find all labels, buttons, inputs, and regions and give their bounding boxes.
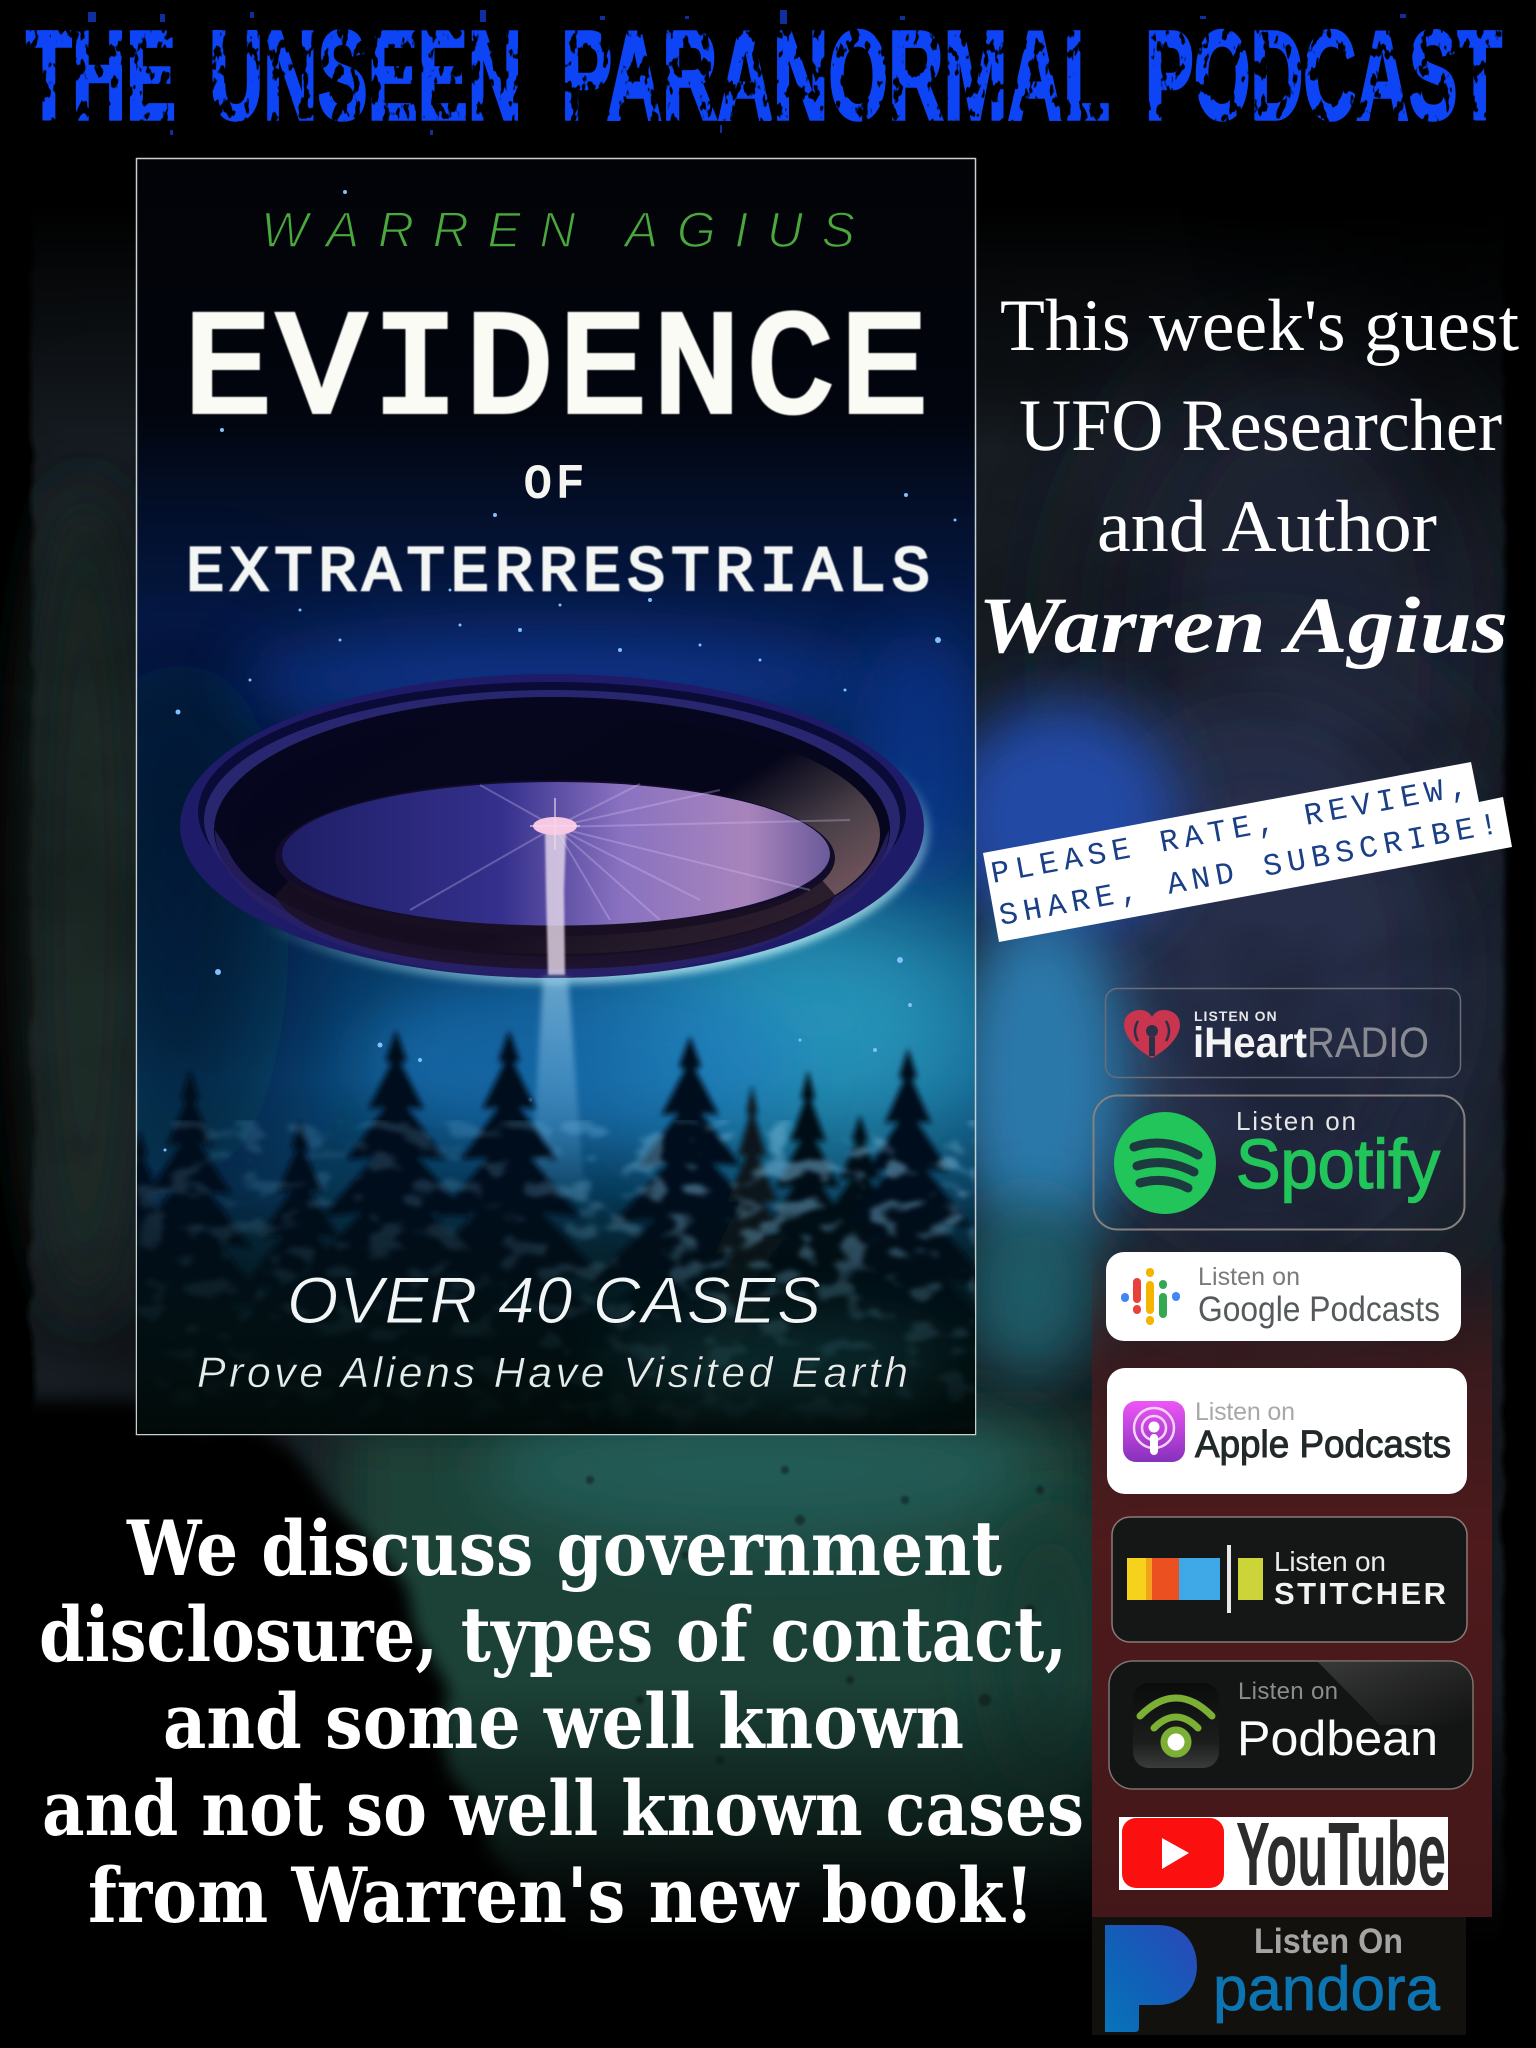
button: Pandora xyxy=(1092,1917,1466,2035)
button: Spotify xyxy=(1094,1096,1464,1230)
button: Podbean: Listen on xyxy=(1238,1678,1338,1705)
button: Stitcher: STITCHER xyxy=(1274,1576,1446,1611)
button: Pandora: Listen On xyxy=(1254,1922,1403,1961)
button: Podbean: Podbean xyxy=(1237,1712,1438,1766)
title: UNSEEN xyxy=(209,5,522,146)
button: Stitcher: Listen on xyxy=(1274,1546,1386,1577)
rate and subscribe banner: PLEASE RATE, REVIEW, xyxy=(988,770,1471,893)
button: iHeartRadio: RADIO xyxy=(1307,1019,1429,1067)
dark specks xyxy=(586,1466,1044,1805)
icon: flying saucer xyxy=(174,674,930,984)
icon: tree silhouette xyxy=(0,1400,660,2048)
discussion text xyxy=(39,1504,1084,1940)
button: Spotify: Listen on xyxy=(1236,1106,1356,1136)
guest heading xyxy=(978,285,1519,670)
book author: WARREN AGIUS xyxy=(261,202,855,258)
trees xyxy=(137,1028,975,1417)
button: Google Podcasts: Listen on xyxy=(1198,1263,1300,1291)
icon: iHeart xyxy=(1124,1010,1180,1058)
button: iHeartRadio: iHeart xyxy=(1193,1019,1307,1067)
icon: Spotify xyxy=(1114,1112,1216,1214)
red panel behind buttons xyxy=(1092,1240,1492,1917)
guest name: Warren Agius xyxy=(978,582,1508,670)
light beam xyxy=(530,978,585,1200)
button: Spotify: Spotify xyxy=(1236,1125,1440,1203)
tree highlights xyxy=(137,1120,975,1430)
book title: EVIDENCE xyxy=(184,289,928,455)
button: iHeartRadio: LISTEN ON xyxy=(1194,1008,1278,1024)
book cover xyxy=(136,158,976,1436)
icon: Pandora P xyxy=(1105,1925,1197,2032)
discussion text: We discuss government xyxy=(126,1504,1002,1593)
guest heading: UFO Researcher xyxy=(1019,385,1502,467)
book tagline: OVER 40 CASES xyxy=(287,1263,821,1337)
title: THE xyxy=(26,5,176,146)
discussion text: disclosure, types of contact, xyxy=(39,1590,1067,1679)
book tagline second line: Prove Aliens Have Visited Earth xyxy=(197,1349,908,1397)
title: PARANORMAL xyxy=(561,5,1110,146)
icon: Podbean xyxy=(1133,1683,1219,1768)
title specks xyxy=(88,10,1406,135)
icon: Stitcher xyxy=(1127,1545,1263,1613)
guest heading: and Author xyxy=(1097,486,1437,568)
rate and subscribe banner: SHARE, AND SUBSCRIBE! xyxy=(996,808,1501,935)
book subtitle: of: OF xyxy=(524,459,584,511)
book subtitle: extraterrestrials: EXTRATERRESTRIALS xyxy=(186,538,930,610)
icon: YouTube play xyxy=(1122,1818,1224,1888)
button: Apple Podcasts: Apple Podcasts xyxy=(1195,1424,1451,1466)
stars xyxy=(164,190,956,1152)
button: Stitcher xyxy=(1112,1517,1467,1642)
button: Google Podcasts xyxy=(1106,1252,1461,1341)
icon: Apple Podcasts xyxy=(1123,1401,1185,1462)
discussion text: from Warren's new book! xyxy=(88,1851,1034,1940)
icon: Google Podcasts xyxy=(1125,1272,1176,1321)
guest heading: This week's guest xyxy=(1000,285,1519,367)
discussion text: and some well known xyxy=(163,1677,964,1766)
title xyxy=(26,5,1502,146)
button: Apple Podcasts: Listen on xyxy=(1195,1398,1295,1426)
button: Apple Podcasts xyxy=(1107,1368,1467,1494)
button: YouTube xyxy=(1119,1805,1448,1905)
discussion text: and not so well known cases xyxy=(42,1764,1084,1853)
button: Podbean xyxy=(1109,1661,1473,1789)
button: Google Podcasts: Google Podcasts xyxy=(1198,1290,1440,1329)
button: iHeartRadio xyxy=(1106,988,1460,1078)
rate and subscribe banner xyxy=(983,762,1512,942)
button: Pandora: pandora xyxy=(1213,1955,1441,2024)
